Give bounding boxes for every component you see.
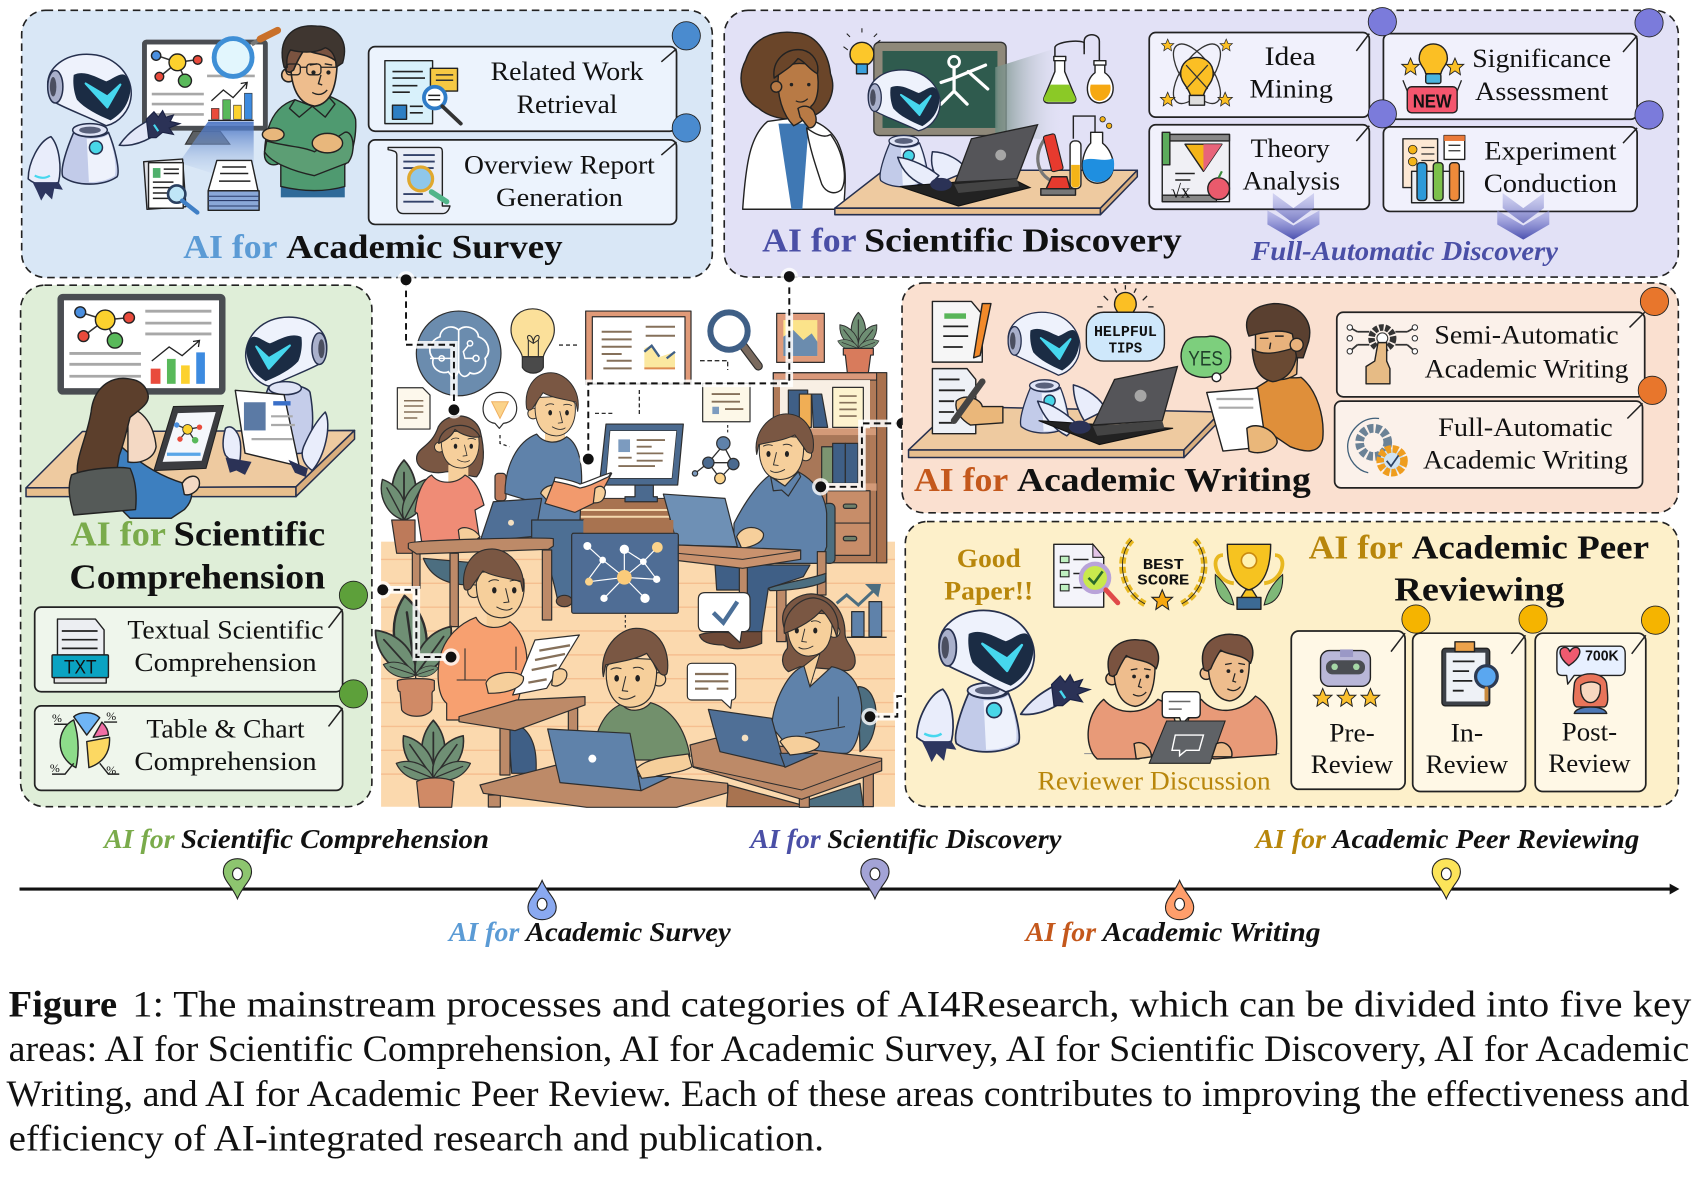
heading: AI for Scientific Discovery: Scientific Discovery bbox=[864, 223, 1182, 260]
caption: figure description bbox=[7, 983, 1692, 1158]
card: Textual Scientific Comprehension bbox=[35, 607, 343, 692]
card: Pre-Review: Pre- bbox=[1329, 719, 1375, 748]
icon: gears bbox=[1348, 418, 1404, 473]
illustration: monitor with charts bbox=[57, 294, 226, 395]
illustration: laptop bbox=[1039, 366, 1177, 445]
heading: AI for Academic Survey: AI for bbox=[183, 229, 278, 266]
label: AI for Academic Survey: Academic Survey bbox=[524, 917, 732, 947]
illustration: left desk and chair bbox=[392, 520, 673, 627]
icon: theory board: √x bbox=[1171, 181, 1190, 201]
card: Idea Mining bbox=[1149, 33, 1369, 117]
group: upper office scene bbox=[374, 309, 887, 563]
label: AI for Scientific Discovery: Scientific Discovery bbox=[827, 824, 1062, 854]
icon: best score badge bbox=[1122, 540, 1204, 609]
label: Reviewer Discussion: Reviewer Discussion bbox=[1038, 766, 1271, 795]
panel: AI for Academic Writing bbox=[902, 283, 1678, 513]
icon: idea bubble bbox=[483, 392, 517, 447]
card: Idea Mining: Idea bbox=[1265, 42, 1316, 71]
caption: figure description: areas: AI for Scientific Comprehension, AI for Academic Survey, AI for Scientific Discovery, AI for Academic bbox=[9, 1028, 1689, 1069]
card: Pre-Review bbox=[1291, 631, 1405, 789]
label: AI for Academic Survey: AI for bbox=[447, 917, 520, 947]
icon: new idea bbox=[1402, 44, 1464, 113]
illustration: laptop of woman bbox=[448, 498, 542, 547]
card: Semi-Automatic Academic Writing: Academic Writing bbox=[1425, 354, 1628, 383]
card: Post-Review bbox=[1535, 633, 1646, 791]
icon: document search bbox=[385, 61, 461, 124]
card: Pre-Review: Review bbox=[1311, 750, 1393, 779]
card: Significance Assessment: Assessment bbox=[1475, 77, 1609, 106]
illustration: bookshelf bbox=[773, 373, 887, 563]
label: AI for Academic Writing bbox=[1024, 917, 1321, 947]
connector dots bbox=[661, 22, 700, 155]
card: Textual Scientific Comprehension: Comprehension bbox=[134, 648, 317, 677]
label: AI for Scientific Comprehension: Scientific Comprehension bbox=[181, 824, 489, 854]
card: In-Review bbox=[1413, 633, 1525, 791]
timeline bbox=[20, 824, 1679, 947]
illustration: woman in pink bbox=[415, 416, 484, 542]
heading: AI for Academic Peer Reviewing: AI for bbox=[1309, 529, 1403, 566]
card: Post-Review: Review bbox=[1548, 749, 1631, 778]
icon: report scroll bbox=[388, 147, 450, 214]
card: Full-Automatic Academic Writing: Academic Writing bbox=[1423, 445, 1628, 474]
icon: documents and stack bbox=[144, 159, 259, 213]
caption: figure description: Figure bbox=[9, 983, 117, 1024]
label: AI for Academic Survey bbox=[447, 917, 732, 947]
card: Full-Automatic Academic Writing bbox=[1335, 401, 1643, 488]
icon: best score badge: SCORE bbox=[1137, 571, 1189, 589]
label: Good Paper bbox=[944, 544, 1033, 606]
card: Table and Chart Comprehension: Table & Chart bbox=[146, 714, 305, 743]
pin: Scientific Discovery bbox=[861, 859, 889, 899]
card: Theory Analysis: Theory bbox=[1251, 134, 1330, 163]
illustration: note and molecule bbox=[692, 383, 750, 484]
panel: AI for Academic Peer Reviewing bbox=[905, 522, 1678, 807]
connector dots bbox=[1391, 605, 1670, 654]
illustration: left potted plant bbox=[367, 594, 461, 716]
card: Theory Analysis bbox=[1149, 125, 1369, 209]
icon: paper and pen bbox=[932, 301, 991, 362]
illustration: robot writing bbox=[1008, 312, 1106, 436]
pin: Academic Peer Reviewing bbox=[1432, 859, 1460, 899]
label: AI for Scientific Discovery: AI for bbox=[748, 824, 821, 854]
card: Table and Chart Comprehension: Comprehension bbox=[134, 747, 317, 776]
illustration: woman at tablet bbox=[69, 378, 199, 518]
icon: pie chart: % bbox=[106, 763, 116, 777]
illustration: man at right desk bbox=[663, 414, 835, 563]
card: Significance Assessment bbox=[1383, 34, 1637, 119]
heading: AI for Academic Peer Reviewing: Reviewing bbox=[1394, 572, 1565, 609]
card: Theory Analysis: Analysis bbox=[1242, 167, 1340, 196]
card: Related Work Retrieval bbox=[369, 47, 677, 131]
label: Good Paper: Good bbox=[957, 544, 1021, 573]
illustration: robot at laptop bbox=[868, 70, 967, 187]
callout: helpful tips: TIPS bbox=[1109, 341, 1142, 357]
icon: robot with stars bbox=[1313, 649, 1380, 706]
icon: gear with hand bbox=[1347, 325, 1418, 384]
icon: pie chart bbox=[50, 709, 119, 777]
card: Overview Report Generation: Overview Report bbox=[464, 150, 656, 179]
illustration: reviewer robot bbox=[917, 610, 1090, 762]
icon: new idea: NEW bbox=[1413, 90, 1452, 111]
illustration: desk bbox=[26, 430, 355, 497]
connector dots bbox=[1356, 8, 1663, 143]
heading: AI for Scientific Discovery bbox=[762, 223, 1182, 260]
heading: AI for Academic Writing bbox=[914, 462, 1311, 499]
icon: pie chart: % bbox=[106, 709, 116, 723]
caption: figure description: efficiency of AI-integrated research and publication. bbox=[9, 1117, 824, 1158]
label: AI for Academic Peer Reviewing: AI for bbox=[1253, 824, 1326, 854]
card: Significance Assessment: Significance bbox=[1472, 44, 1611, 73]
heading: AI for Academic Writing: Academic Writing bbox=[1017, 462, 1311, 499]
callout: helpful tips: HELPFUL bbox=[1094, 325, 1157, 341]
icon: likes and person: 700K bbox=[1585, 647, 1619, 664]
callout: yes bbox=[1181, 336, 1231, 382]
caption: figure description: Writing, and AI for Academic Peer Review. Each of these areas contributes to improving the effectiveness and bbox=[7, 1073, 1689, 1114]
icon: magnifier bbox=[700, 312, 758, 370]
heading: AI for Scientific Comprehension: Scientific bbox=[173, 514, 325, 553]
card: Experiment Conduction bbox=[1383, 127, 1637, 211]
pin: Academic Survey bbox=[528, 880, 556, 920]
illustration: robot bbox=[28, 54, 131, 201]
heading: AI for Academic Writing: AI for bbox=[914, 462, 1008, 499]
illustration: robot hand pointing bbox=[119, 111, 180, 146]
icon: TXT file: TXT bbox=[64, 656, 97, 678]
icon: lightbulb bbox=[511, 309, 580, 373]
icon: comment bubble bbox=[687, 663, 736, 708]
illustration: scientist woman bbox=[741, 32, 845, 209]
illustration: desk bbox=[909, 407, 1221, 458]
panel: AI for Scientific Comprehension bbox=[21, 285, 372, 807]
icon: lightbulb bbox=[843, 28, 880, 74]
icon: tablet bbox=[154, 406, 223, 471]
card: Textual Scientific Comprehension: Textual Scientific bbox=[127, 616, 324, 645]
illustration: chalkboard bbox=[874, 42, 1065, 141]
heading: AI for Scientific Comprehension bbox=[69, 514, 325, 597]
icon: trophy bbox=[1215, 544, 1283, 609]
card: Semi-Automatic Academic Writing bbox=[1337, 312, 1645, 397]
icon: idea atoms bbox=[1160, 37, 1232, 111]
icon: test tubes bbox=[1403, 136, 1465, 203]
icon: TXT file bbox=[52, 619, 108, 683]
panel: central research team illustration bbox=[367, 309, 895, 807]
illustration: laptop bbox=[900, 125, 1038, 206]
card: In-Review: Review bbox=[1426, 750, 1508, 779]
heading: AI for Scientific Comprehension: AI for bbox=[70, 514, 166, 553]
icon: growth chart bbox=[837, 584, 887, 637]
card: Semi-Automatic Academic Writing: Semi-Automatic bbox=[1434, 321, 1619, 350]
icon: likes and person bbox=[1557, 646, 1625, 713]
callout: helpful tips bbox=[1086, 285, 1164, 361]
illustration: bearded man bbox=[1207, 304, 1323, 453]
illustration: network board bbox=[572, 533, 678, 628]
card: Overview Report Generation bbox=[369, 140, 677, 224]
card: Full-Automatic Academic Writing: Full-Automatic bbox=[1438, 413, 1613, 442]
illustration: back desk and monitor bbox=[570, 390, 683, 538]
illustration: man with book bbox=[495, 373, 612, 522]
panel: AI for Scientific Discovery bbox=[724, 8, 1678, 277]
icon: potted plant bbox=[835, 312, 882, 373]
connectors: dashed links between panels and team bbox=[374, 268, 932, 725]
icon: flasks bbox=[1044, 35, 1113, 103]
illustration: desk bbox=[835, 170, 1137, 215]
illustration: right desk and man legs bbox=[678, 545, 826, 649]
illustration: front desks and laptops bbox=[480, 709, 882, 807]
icon: check bubble bbox=[698, 593, 750, 643]
icon: clipboard with magnifier bbox=[1442, 642, 1497, 706]
illustration: researcher with crossed arms bbox=[262, 26, 356, 197]
pin: Academic Writing bbox=[1165, 880, 1194, 920]
card: Post-Review: Post- bbox=[1562, 718, 1617, 747]
arrows: double chevrons bbox=[1267, 193, 1549, 240]
icon: magnifying glass bbox=[214, 30, 278, 76]
illustration: monitor with charts bbox=[142, 40, 268, 186]
icon: microscope and beaker bbox=[1038, 116, 1114, 195]
icon: framed report bbox=[586, 311, 691, 384]
pin: Scientific Comprehension bbox=[223, 859, 252, 899]
heading: AI for Scientific Discovery: AI for bbox=[762, 223, 857, 260]
heading: AI for Academic Peer Reviewing bbox=[1309, 529, 1649, 609]
label: Good Paper: Paper!! bbox=[944, 577, 1033, 606]
card: Experiment Conduction: Experiment bbox=[1484, 136, 1617, 165]
callout: yes: YES bbox=[1188, 345, 1223, 370]
caption: figure description: 1: The mainstream processes and categories of AI4Research, which can be divided into five key bbox=[132, 983, 1692, 1024]
connector dots bbox=[329, 581, 368, 726]
heading: AI for Academic Peer Reviewing: Academic Peer bbox=[1412, 529, 1649, 566]
illustration: man in green bbox=[593, 628, 690, 760]
label: Full-Automatic Discovery: Full-Automatic Discovery bbox=[1250, 236, 1559, 266]
card: Related Work Retrieval: Retrieval bbox=[517, 90, 617, 119]
illustration: woman in blue bbox=[772, 594, 876, 753]
label: AI for Academic Writing: AI for bbox=[1024, 917, 1097, 947]
illustration: two reviewers bbox=[1084, 634, 1279, 763]
group: lower office scene bbox=[367, 520, 887, 807]
card: Experiment Conduction: Conduction bbox=[1484, 169, 1617, 198]
connector dots bbox=[1627, 287, 1669, 419]
illustration: office floor bbox=[381, 542, 895, 807]
illustration: small desk bbox=[459, 697, 585, 775]
illustration: man in orange with paper bbox=[438, 549, 579, 720]
label: AI for Scientific Comprehension: AI for bbox=[102, 824, 175, 854]
icon: document and writing hand bbox=[932, 369, 1003, 434]
card: Idea Mining: Mining bbox=[1250, 75, 1333, 104]
label: AI for Academic Peer Reviewing: Academic Peer Reviewing bbox=[1330, 824, 1639, 854]
illustration: plant behind woman bbox=[374, 460, 434, 524]
card: Overview Report Generation: Generation bbox=[496, 183, 623, 212]
icon: framed picture bbox=[777, 313, 824, 362]
card: Related Work Retrieval: Related Work bbox=[491, 57, 645, 86]
card: Table and Chart Comprehension bbox=[35, 706, 343, 790]
icon: checklist review bbox=[1054, 544, 1118, 607]
icon: small document bbox=[397, 388, 430, 429]
illustration: floor plant bbox=[393, 720, 473, 807]
illustration: robot reading bbox=[223, 317, 328, 477]
icon: best score badge: BEST bbox=[1143, 556, 1184, 574]
icon: pie chart: % bbox=[50, 761, 60, 775]
card: In-Review: In- bbox=[1451, 719, 1483, 748]
arrow: timeline axis bbox=[20, 884, 1679, 894]
label: AI for Academic Writing: Academic Writing bbox=[1100, 917, 1321, 947]
panel: AI for Academic Survey bbox=[22, 10, 712, 278]
heading: AI for Academic Survey: Academic Survey bbox=[286, 229, 563, 266]
icon: brain circle bbox=[416, 311, 501, 396]
icon: pie chart: % bbox=[52, 711, 62, 725]
icon: theory board bbox=[1162, 132, 1229, 202]
heading: AI for Scientific Comprehension: Comprehension bbox=[69, 558, 325, 597]
heading: AI for Academic Survey bbox=[183, 229, 563, 266]
